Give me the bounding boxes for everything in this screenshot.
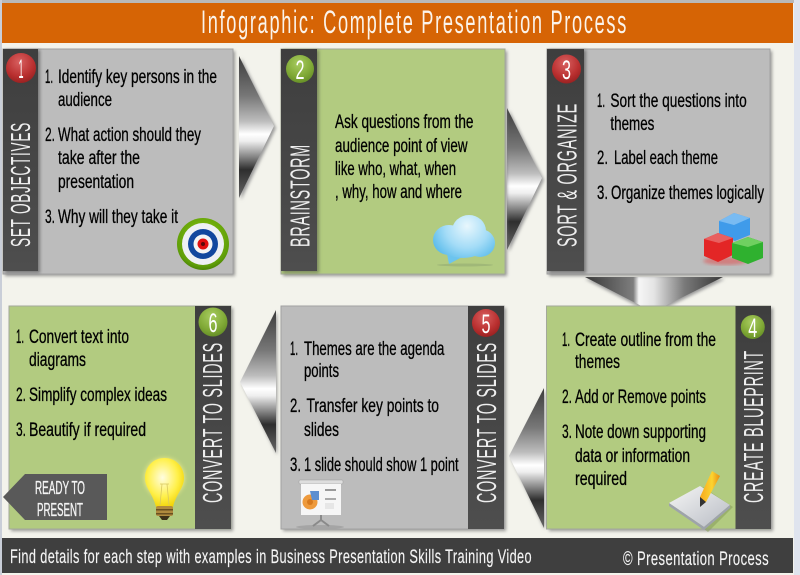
arrow: step 3 to step 4	[585, 277, 725, 314]
footer bar	[2, 538, 793, 573]
callout: ready to present	[3, 474, 107, 520]
step 1 list: Identify key persons in the	[58, 67, 217, 88]
step 6 list: Convert text into	[29, 327, 129, 348]
step 1 list: presentation	[58, 172, 134, 193]
step 3 badge: 3	[562, 55, 571, 85]
footer note: Find details for each step with examples in Business Presentation Skills Training Video	[10, 546, 532, 568]
step 1 list	[45, 67, 217, 228]
title bar	[2, 3, 793, 43]
step 6 list: 3.	[16, 420, 26, 441]
arrow: step 5 to step 6	[240, 310, 277, 455]
step 4 list: themes	[575, 352, 620, 373]
step 1 list: 2.	[45, 125, 55, 146]
step 1 list: What action should they	[58, 125, 201, 146]
step 5 heading: CONVERT TO SLIDES	[471, 342, 502, 503]
step 4 list: 3.	[562, 422, 572, 443]
step 1 list: 3.	[45, 207, 55, 228]
panel: step 2 brainstorm	[281, 49, 507, 276]
step 2 text	[335, 112, 474, 203]
window frame: left edge	[0, 0, 2, 575]
step 3 badge	[552, 54, 581, 85]
step 5 badge: 5	[482, 309, 490, 339]
step 5 list: 2.	[290, 396, 301, 417]
step 4 list	[562, 330, 716, 490]
window frame: top edge	[0, 0, 800, 3]
icon: light bulb	[144, 458, 184, 520]
icon: notepad and pencil	[669, 471, 733, 532]
step 6 heading: CONVERT TO SLIDES	[197, 342, 228, 503]
icon: target	[177, 218, 229, 270]
step 3 list: 1.	[597, 91, 605, 112]
icon: cloud	[433, 215, 495, 266]
step 1 badge: 1	[18, 54, 24, 84]
arrow: step 1 to step 2	[239, 56, 276, 200]
step 4 list: 2.	[562, 387, 572, 408]
step 6 badge	[198, 308, 228, 338]
step 6 badge: 6	[208, 308, 218, 338]
step 1 list: take after the	[58, 148, 140, 169]
step 2 badge	[286, 55, 314, 85]
step 6 list	[16, 327, 167, 441]
step 2 text: audience point of view	[335, 136, 468, 157]
step 4 list: Note down supporting	[575, 422, 706, 443]
step 4 badge	[741, 313, 765, 343]
step 6 list: diagrams	[29, 350, 86, 371]
step 3 list: 3.	[597, 183, 608, 204]
step 6 list: Simplify complex ideas	[29, 385, 167, 406]
step 4 list: Add or Remove points	[575, 387, 706, 408]
step 5 list: 1.	[290, 339, 298, 360]
step 5 list: 1 slide should show 1 point	[304, 455, 459, 476]
step 4 list: data or information	[575, 446, 690, 467]
step 5 list: Themes are the agenda	[304, 339, 445, 360]
step 5 list: slides	[304, 420, 339, 441]
step 4 list: required	[575, 469, 627, 490]
step 2 badge: 2	[296, 55, 304, 85]
step 5 list: points	[304, 361, 339, 382]
step 3 list: Sort the questions into	[610, 91, 747, 112]
panel: step 4 create blueprint	[546, 306, 773, 532]
step 6 list: 2.	[16, 385, 26, 406]
callout: ready to present: PRESENT	[37, 500, 83, 520]
step 2 heading: BRAINSTORM	[284, 144, 316, 247]
step 6 list: Beautify if required	[29, 420, 146, 441]
step 5 list: 3.	[290, 455, 301, 476]
panel: step 3 sort and organize	[547, 49, 772, 276]
step 5 badge	[472, 309, 500, 339]
step 3 list: 2.	[597, 148, 608, 169]
step 1 list: audience	[58, 90, 112, 111]
step 6 list: 1.	[16, 327, 24, 348]
callout: ready to present: READY TO	[35, 478, 85, 498]
icon: cubes	[703, 213, 763, 265]
arrow: step 2 to step 3	[507, 108, 544, 252]
icon: presentation board	[296, 480, 344, 529]
panel: step 1 set objectives	[3, 49, 235, 276]
step 1 badge	[6, 53, 36, 84]
step 4 list: 1.	[562, 330, 570, 351]
step 3 list	[597, 91, 764, 204]
arrow: step 4 to step 5	[509, 388, 545, 530]
step 4 badge: 4	[748, 313, 757, 343]
window frame: right edge	[794, 0, 800, 575]
step 2 text: like who, what, when	[335, 159, 456, 180]
step 4 list: Create outline from the	[575, 330, 716, 351]
step 5 list	[290, 339, 459, 476]
step 1 list: Why will they take it	[58, 207, 179, 228]
step 3 list: Label each theme	[614, 148, 718, 169]
step 2 text: , why, how and where	[335, 182, 462, 203]
step 3 list: themes	[610, 114, 654, 135]
step 5 list: Transfer key points to	[306, 396, 439, 417]
panel: step 6 convert to slides	[3, 306, 233, 531]
step 1 list: 1.	[45, 67, 53, 88]
panel: step 5 convert to slides	[281, 306, 506, 531]
step 2 text: Ask questions from the	[335, 112, 474, 133]
step 4 heading: CREATE BLUEPRINT	[738, 350, 769, 503]
